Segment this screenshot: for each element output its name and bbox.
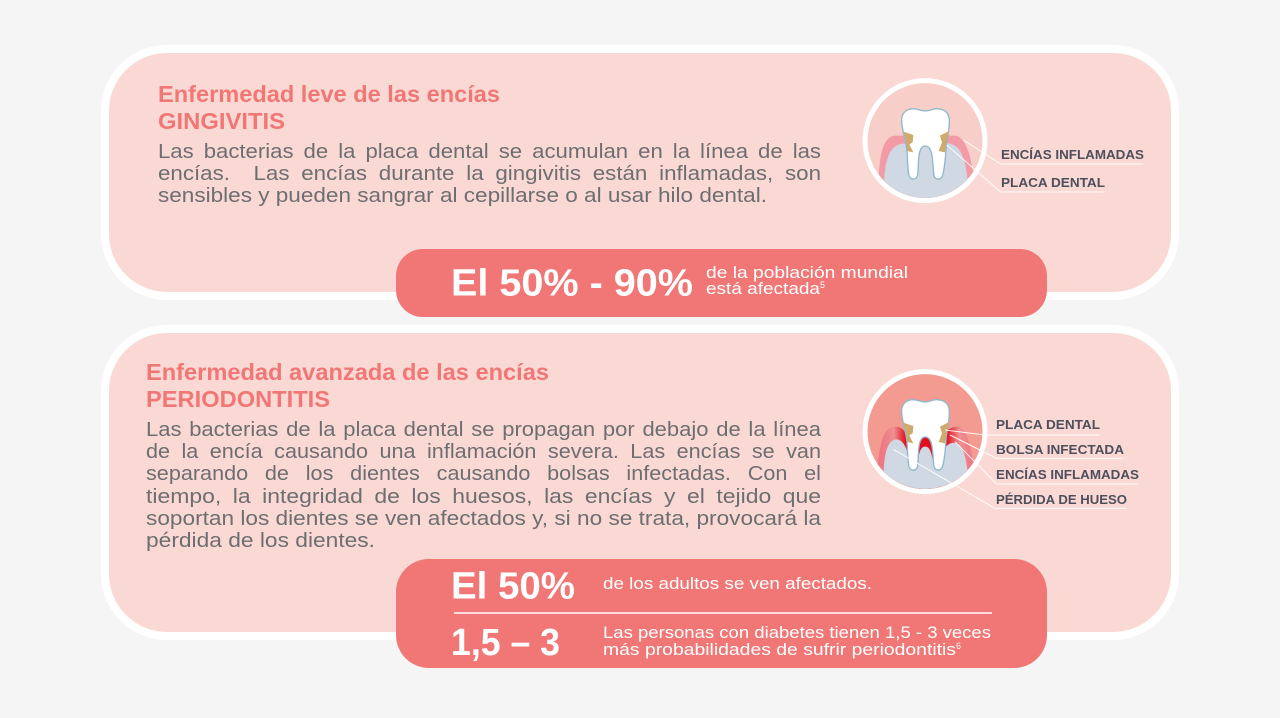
label: pérdida de hueso: PÉRDIDA DE HUESO — [996, 492, 1127, 507]
label: placa dental — [945, 418, 1100, 435]
heading: periodontitis: Enfermedad avanzada de las encías — [146, 359, 549, 385]
text block: periodontitis description: de la encía causando una inflamación severa. Las encías se van — [146, 441, 821, 463]
stat pill: periodontitis prevalence — [396, 559, 1047, 668]
text block: periodontitis description — [146, 419, 822, 552]
panel: periodontitis — [105, 329, 1175, 668]
text block: periodontitis description: pérdida de los dientes. — [146, 530, 375, 552]
text block: periodontitis description: soportan los dientes se ven afectados y, si no se trata, provocará la — [146, 508, 822, 530]
heading: periodontitis: PERIODONTITIS — [146, 386, 330, 412]
stat pill: periodontitis prevalence: 1,5 – 3 — [451, 622, 560, 664]
label: encías inflamadas: ENCÍAS INFLAMADAS — [1001, 147, 1144, 162]
stat pill: periodontitis prevalence: 6 — [956, 641, 961, 651]
text block: gingivitis description: sensibles y pueden sangrar al cepillarse o al usar hilo dental. — [158, 185, 767, 207]
stat pill: gingivitis prevalence: 5 — [820, 280, 825, 290]
text block: periodontitis description: Las bacterias de la placa dental se propagan por debajo de la línea — [146, 419, 822, 441]
label: placa dental: PLACA DENTAL — [996, 418, 1100, 432]
heading: gingivitis: GINGIVITIS — [158, 108, 285, 134]
stat pill: gingivitis prevalence: está afectada — [706, 279, 821, 298]
text block: periodontitis description: separando de los dientes causando bolsas infectadas. Con el — [146, 463, 821, 485]
label: bolsa infectada: BOLSA INFECTADA — [996, 443, 1124, 457]
icon: tooth with gingivitis — [865, 81, 985, 201]
heading: gingivitis — [158, 81, 500, 134]
label: pérdida de hueso — [893, 449, 1127, 508]
text block: gingivitis description: Las bacterias de la placa dental se acumulan en la línea de las — [158, 141, 821, 163]
stat pill: periodontitis prevalence: Las personas con diabetes tienen 1,5 - 3 veces — [603, 623, 991, 642]
heading: periodontitis — [146, 359, 549, 412]
stat pill: gingivitis prevalence: de la población mundial — [706, 263, 908, 282]
text block: gingivitis description — [158, 141, 821, 207]
text block: gingivitis description: encías. Las encías durante la gingivitis están inflamadas, son — [158, 163, 821, 185]
label: placa dental — [947, 145, 1105, 192]
label: encías inflamadas: ENCÍAS INFLAMADAS — [996, 467, 1139, 482]
heading: gingivitis: Enfermedad leve de las encías — [158, 81, 500, 107]
panel: gingivitis — [105, 49, 1175, 317]
stat pill: periodontitis prevalence: de los adultos se ven afectados. — [603, 574, 872, 593]
label: bolsa infectada — [950, 435, 1124, 458]
stat pill: periodontitis prevalence: El 50% — [451, 566, 575, 608]
stat pill: gingivitis prevalence: El 50% - 90% — [451, 262, 693, 304]
text block: periodontitis description: tiempo, la integridad de los huesos, las encías y el tejido que — [146, 486, 821, 508]
stat pill: gingivitis prevalence — [396, 249, 1047, 317]
label: encías inflamadas — [955, 442, 1139, 484]
stat pill: periodontitis prevalence: más probabilidades de sufrir periodontitis — [603, 640, 956, 659]
label: encías inflamadas — [963, 140, 1144, 164]
icon: tooth with periodontitis — [865, 372, 985, 492]
label: placa dental: PLACA DENTAL — [1001, 176, 1105, 190]
